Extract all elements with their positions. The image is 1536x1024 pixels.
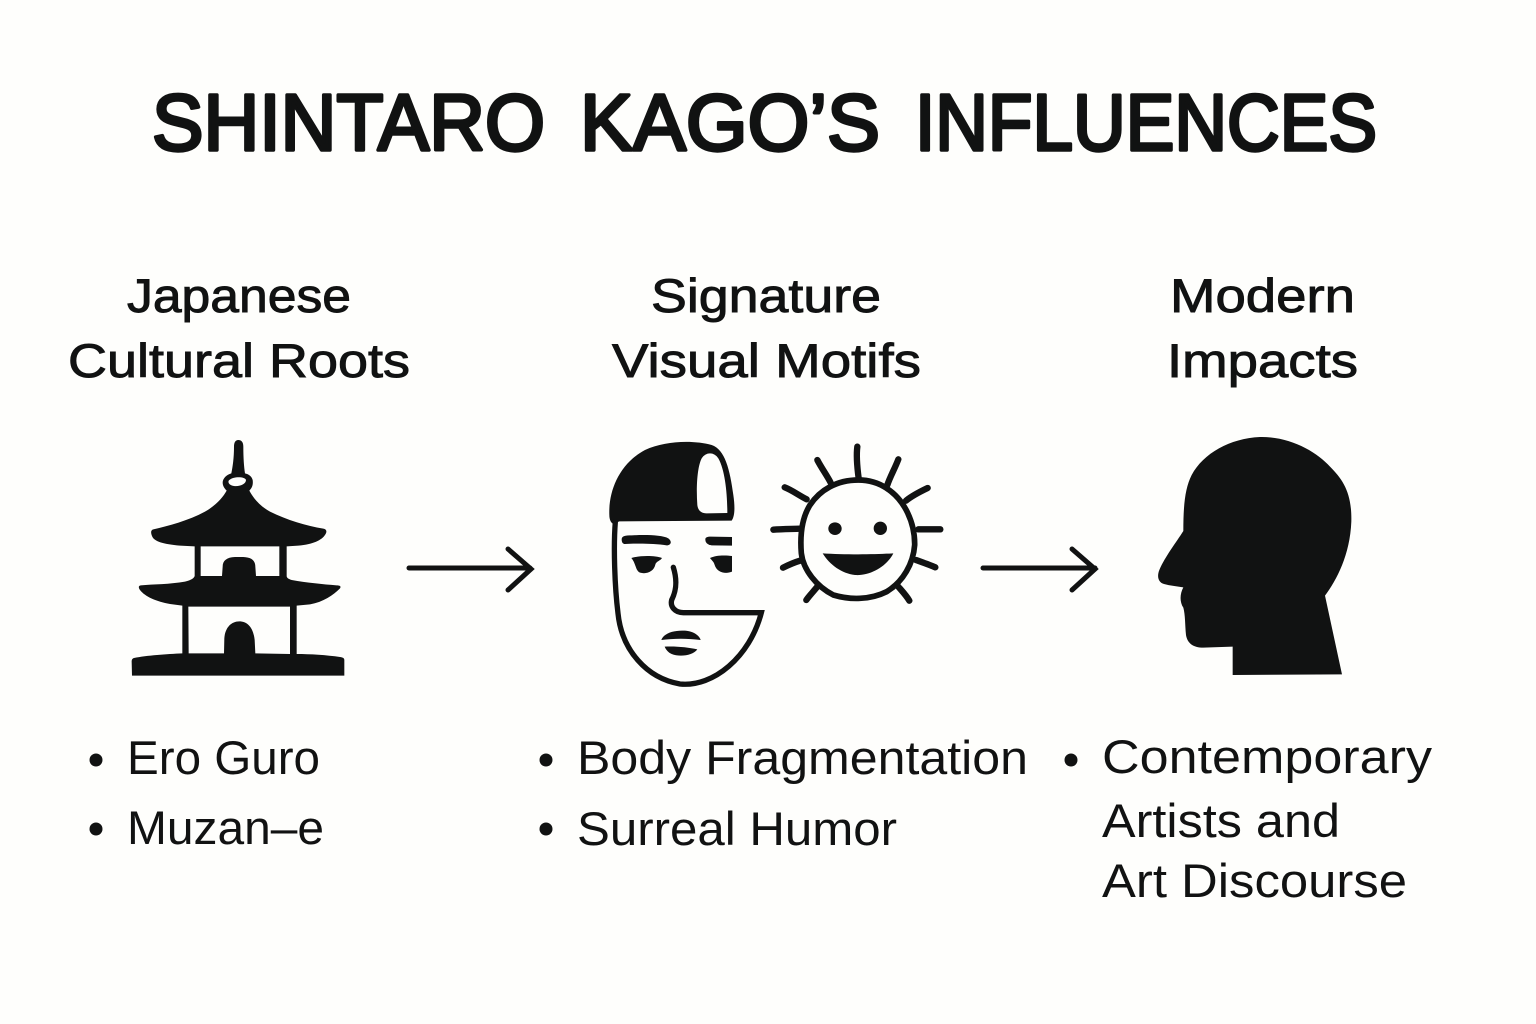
bullet list: Body Fragmentation, Surreal Humor	[540, 731, 1028, 855]
icon: pagoda	[132, 440, 344, 676]
heading: Signature Visual Motifs: Visual Motifs	[612, 334, 921, 387]
icon: head silhouette	[1158, 437, 1351, 675]
title: SHINTARO	[152, 78, 545, 167]
heading: Japanese Cultural Roots: Cultural Roots	[68, 334, 410, 387]
arrow: roots to motifs	[409, 549, 531, 590]
heading: Modern Impacts: Modern	[1170, 269, 1355, 322]
icon: fragmented face	[609, 442, 761, 684]
bullet list: Contemporary Artists and Art Discourse: Art Discourse	[1102, 854, 1407, 907]
bullet list: Contemporary Artists and Art Discourse: Artists and	[1102, 794, 1340, 847]
bullet list: Body Fragmentation, Surreal Humor: Body Fragmentation	[577, 731, 1028, 784]
heading: Modern Impacts	[1167, 269, 1358, 387]
heading: Modern Impacts: Impacts	[1167, 334, 1358, 387]
bullet list: Ero Guro, Muzan-e: Ero Guro	[127, 731, 320, 784]
bullet list: Ero Guro, Muzan-e: Muzan–e	[127, 801, 324, 854]
arrow: motifs to impacts	[983, 549, 1095, 590]
heading: Signature Visual Motifs: Signature	[651, 269, 881, 322]
title: INFLUENCES	[915, 78, 1377, 167]
bullet list: Contemporary Artists and Art Discourse: Contemporary	[1102, 730, 1433, 783]
heading: Japanese Cultural Roots	[68, 269, 410, 387]
title	[152, 78, 1377, 167]
bullet list: Contemporary Artists and Art Discourse	[1064, 730, 1433, 907]
bullet list: Ero Guro, Muzan-e	[90, 731, 324, 854]
title: KAGO’S	[580, 78, 880, 167]
column: Signature Visual Motifs	[540, 269, 1028, 855]
column: Modern Impacts	[1064, 269, 1433, 907]
bullet list: Body Fragmentation, Surreal Humor: Surreal Humor	[577, 802, 897, 855]
heading: Japanese Cultural Roots: Japanese	[127, 269, 351, 322]
column: Japanese Cultural Roots	[68, 269, 410, 854]
heading: Signature Visual Motifs	[612, 269, 921, 387]
icon: smiling sun	[773, 447, 940, 601]
